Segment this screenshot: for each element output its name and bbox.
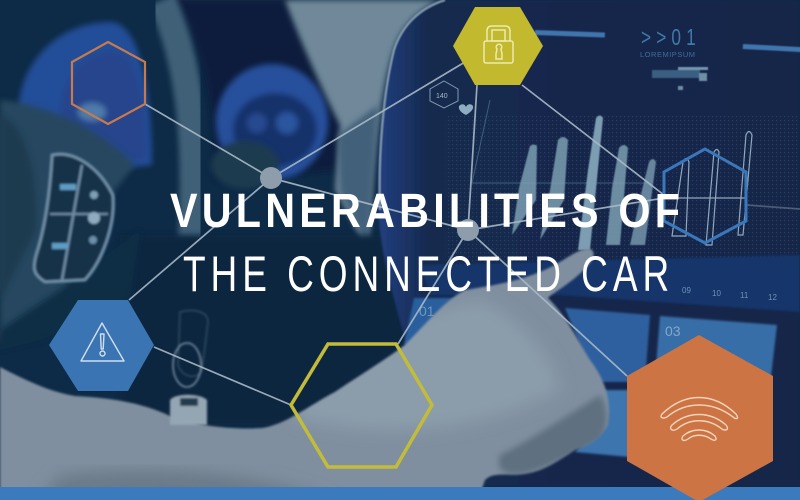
screen panel 03: [655, 316, 777, 385]
screen channel numbers: 12: [768, 293, 777, 302]
chart spikes: [512, 116, 656, 250]
network node: right: [457, 219, 479, 241]
readout text: >>01: [641, 26, 696, 51]
steering column rim: [162, 0, 194, 240]
hexagon: yellow padlock: [453, 7, 543, 85]
icon: warning triangle: [81, 323, 124, 361]
icon: wifi signal: [661, 398, 738, 440]
dotted chart area: [445, 115, 800, 265]
hexagon outline: orange: [72, 42, 145, 124]
second gauge: [216, 64, 328, 180]
screen panel 01: [404, 298, 470, 345]
small hexagon readout: 140: [436, 93, 448, 100]
bottom blue band: [0, 487, 800, 500]
touch screen body: [378, 0, 800, 487]
key fob: [170, 310, 208, 425]
steering wheel: [0, 100, 135, 340]
small hexagon readout: [430, 81, 458, 108]
dashboard light trim: [285, 0, 440, 250]
outlined chart spikes: [664, 132, 752, 245]
gear knob: [211, 141, 279, 189]
hexagon: orange wifi: [627, 335, 773, 500]
arm and hand: [0, 240, 620, 500]
screen lower panel: [575, 390, 640, 458]
lower blue screen band: [420, 255, 800, 312]
heart readout: [459, 104, 473, 115]
screen channel numbers: [682, 286, 777, 302]
screen channel numbers: 11: [740, 291, 749, 300]
binnacle dark recess: [175, 0, 345, 180]
screen channel numbers: 10: [712, 289, 721, 298]
dashboard bars: [535, 30, 800, 90]
screen channel numbers: 09: [682, 286, 691, 295]
screen panel 03: 03: [665, 323, 681, 339]
left cluster: speedometer gauge: [18, 22, 152, 175]
steering wheel buttons: [34, 154, 113, 282]
hexagon outline: blue: [664, 149, 746, 243]
title line 1: VULNERABILITIES OF: [170, 184, 680, 238]
title: [170, 184, 680, 302]
network connector lines: [129, 62, 800, 405]
background photo: car interior: LOREMIPSUM: [640, 50, 695, 59]
network node: left: [260, 167, 282, 189]
icon: padlock: [484, 26, 513, 63]
hexagon outline: yellow: [291, 344, 432, 467]
title line 2: THE CONNECTED CAR: [183, 247, 669, 302]
hexagon: blue warning: [49, 300, 154, 391]
lower dark dash: [120, 235, 410, 425]
screen panel 02: [565, 308, 650, 382]
screen panel 01: 01: [419, 303, 435, 319]
